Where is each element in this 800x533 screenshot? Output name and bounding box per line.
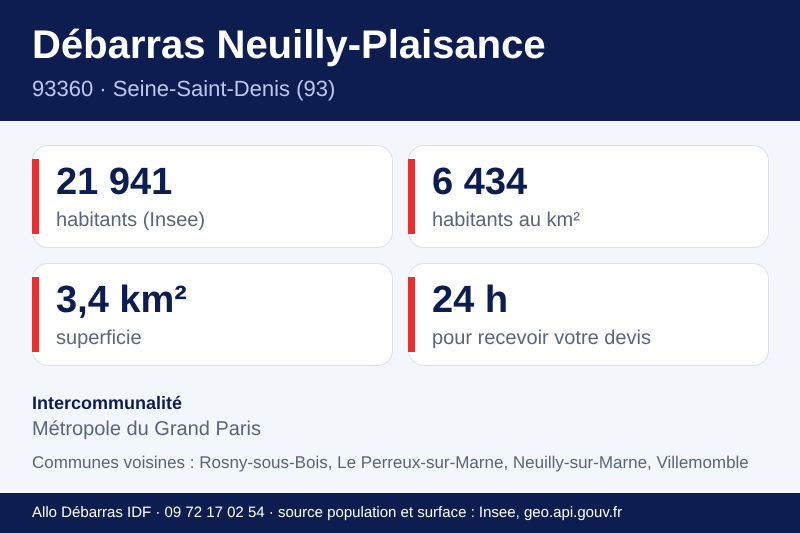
footer band (0, 493, 800, 533)
intercommunality name: Métropole du Grand Paris (32, 418, 261, 440)
stat value: quote delay: 24 h (432, 279, 508, 321)
subtitle: 93360 · Seine-Saint-Denis (93) (32, 76, 335, 101)
accent bar: population (32, 159, 39, 234)
header band (0, 0, 800, 121)
stat card: population (32, 145, 393, 248)
stat label: quote delay: pour recevoir votre devis (432, 327, 651, 349)
accent bar: area (32, 277, 39, 352)
intercommunality heading: Intercommunalité (32, 393, 182, 413)
stat label: density: habitants au km² (432, 209, 580, 231)
stat value: population: 21 941 (56, 161, 172, 203)
title: Débarras Neuilly-Plaisance (32, 23, 546, 67)
stat card: quote delay (408, 263, 769, 366)
stat card: area (32, 263, 393, 366)
stat label: area: superficie (56, 327, 142, 349)
stat card: density (408, 145, 769, 248)
stat value: density: 6 434 (432, 161, 527, 203)
stat value: area: 3,4 km² (56, 279, 187, 321)
stat label: population: habitants (Insee) (56, 209, 205, 231)
accent bar: quote delay (408, 277, 415, 352)
footer text: Allo Débarras IDF · 09 72 17 02 54 · source population et surface : Insee, geo.api.gouv.fr (32, 504, 622, 521)
neighbouring communes: Communes voisines : Rosny-sous-Bois, Le Perreux-sur-Marne, Neuilly-sur-Marne, Villemomble (32, 453, 749, 472)
accent bar: density (408, 159, 415, 234)
